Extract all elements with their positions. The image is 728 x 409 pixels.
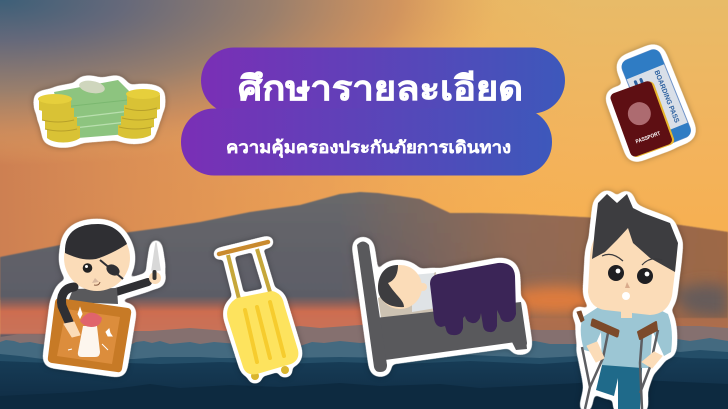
illustration: damaged yellow suitcase — [219, 242, 298, 380]
mushroom bottle — [78, 326, 100, 357]
top pill — [201, 48, 565, 114]
head — [64, 225, 130, 291]
icon: money and coins — [38, 79, 160, 142]
passport: PASSPORT — [635, 131, 662, 145]
body — [227, 291, 298, 374]
illustration: boy on crutches — [577, 194, 678, 409]
head — [378, 265, 422, 309]
bed frame — [375, 302, 527, 360]
crutch poles — [582, 330, 658, 409]
telescopic handle — [228, 249, 270, 299]
crutch handles — [592, 320, 618, 336]
shirt and arms — [581, 306, 672, 368]
hands — [587, 342, 604, 362]
blanket — [430, 263, 516, 335]
face — [588, 226, 677, 315]
banknote stack — [54, 80, 137, 138]
coins right — [118, 89, 160, 139]
eyepatch — [100, 260, 123, 279]
wheels — [251, 372, 259, 380]
hair — [592, 194, 678, 272]
eyebrows — [602, 254, 662, 265]
background: mountains and forest — [0, 192, 728, 409]
coins left — [38, 94, 80, 142]
bottom pill — [181, 108, 552, 176]
treasure frame — [48, 298, 131, 372]
pillow and sheet — [378, 272, 438, 318]
nose and mouth — [625, 282, 630, 288]
heading: ศึกษารายละเอียด — [238, 70, 523, 108]
subheading: ความคุ้มครองประกันภัยการเดินทาง — [226, 138, 511, 158]
eyes — [608, 265, 624, 281]
neck — [621, 310, 632, 318]
icon: boarding pass and passport — [609, 47, 693, 159]
background: sunset sky — [0, 0, 728, 300]
illustration: person in bed — [357, 242, 527, 372]
pants — [596, 365, 642, 409]
illustration: pirate with treasure frame — [48, 224, 161, 372]
arm right and knife — [116, 282, 148, 292]
body — [68, 288, 118, 304]
title banner — [181, 48, 565, 176]
boarding pass: BOARDING PASS — [652, 70, 680, 124]
arm left and hand — [62, 287, 74, 322]
